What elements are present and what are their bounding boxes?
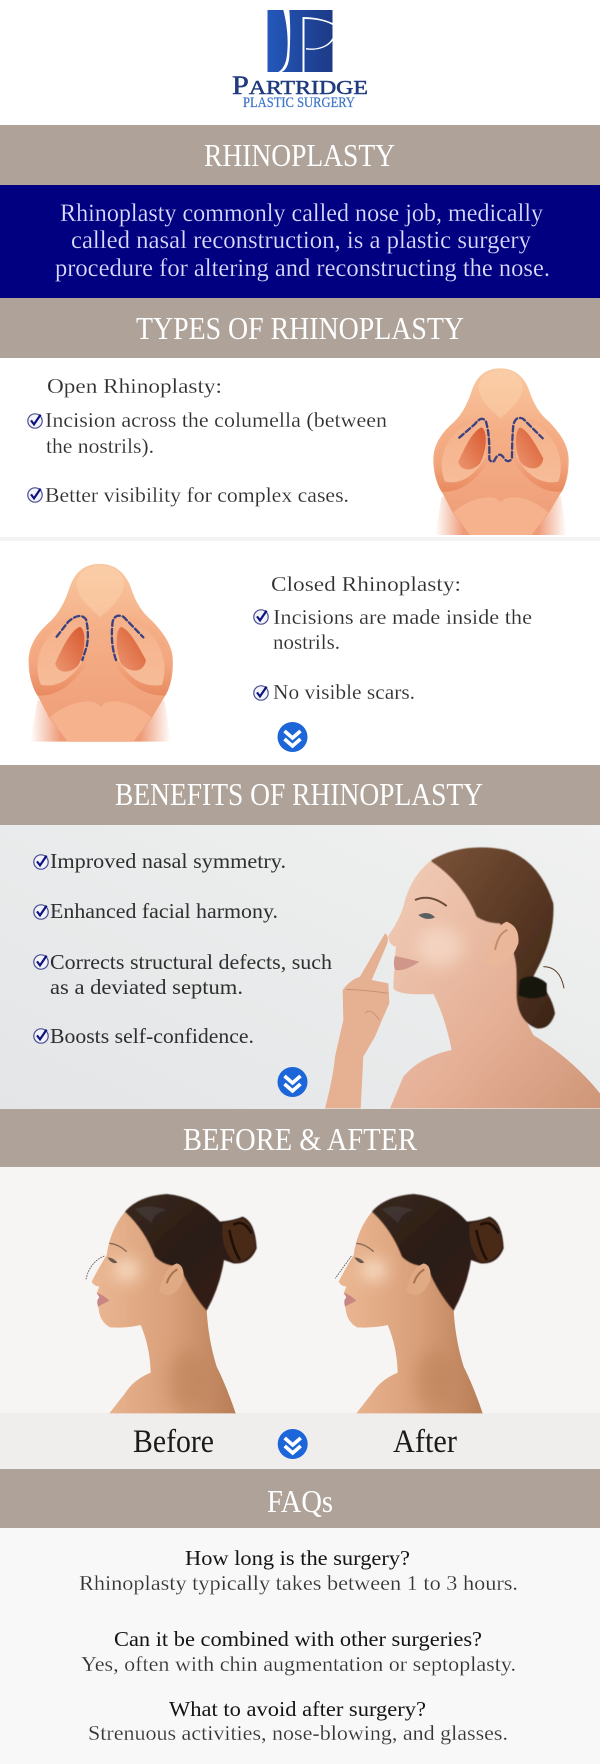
icon: chevron down <box>278 1067 308 1097</box>
panel: before and after <box>0 1167 600 1469</box>
panel: benefits <box>0 825 600 1109</box>
band: benefits heading: BENEFITS OF RHINOPLASTY <box>115 776 483 812</box>
panel: open rhinoplasty <box>0 358 600 537</box>
closed bullet 1: nostrils. <box>273 630 340 654</box>
label: before: Before <box>133 1424 214 1460</box>
faq 2 <box>81 1627 516 1676</box>
faq 3: Strenuous activities, nose-blowing, and glasses. <box>88 1721 508 1745</box>
benefit 3 <box>34 950 332 999</box>
logo subtitle: PLASTIC SURGERY <box>243 95 355 111</box>
logo <box>232 10 368 111</box>
closed bullet 1: Incisions are made inside the <box>273 605 532 629</box>
open bullet 2: Better visibility for complex cases. <box>45 483 349 507</box>
panel: closed rhinoplasty <box>0 541 600 765</box>
logo wordmark: PARTRIDGE <box>232 71 368 100</box>
band: faqs heading <box>0 1469 600 1528</box>
icon: chevron down <box>278 1429 308 1459</box>
open bullet 1: Incision across the columella (between <box>45 408 387 432</box>
benefit 4: Boosts self-confidence. <box>50 1024 254 1048</box>
band: types heading <box>0 298 600 358</box>
closed bullet 2: No visible scars. <box>273 680 415 704</box>
panel: intro <box>0 185 600 298</box>
band: before and after heading: BEFORE & AFTER <box>183 1121 418 1157</box>
benefit 2: Enhanced facial harmony. <box>50 899 278 923</box>
photo: woman touching nose <box>325 847 600 1108</box>
label: after: After <box>393 1424 457 1460</box>
photo: after profile <box>335 1194 504 1413</box>
faq 3: What to avoid after surgery? <box>169 1697 426 1721</box>
closed bullet 1 <box>254 605 532 654</box>
open bullet 1: the nostrils). <box>46 434 154 458</box>
open bullet 1 <box>28 408 387 458</box>
panel: intro: procedure for altering and reconstructing the nose. <box>55 255 550 282</box>
band: faqs heading: FAQs <box>267 1483 333 1519</box>
nose diagram: open incision <box>433 368 569 535</box>
faq 1: Rhinoplasty typically takes between 1 to 3 hours. <box>79 1571 518 1595</box>
closed rhinoplasty title: Closed Rhinoplasty: <box>271 572 461 596</box>
closed incision dashes <box>57 616 143 660</box>
benefit 3: Corrects structural defects, such <box>50 950 332 974</box>
faq 1: How long is the surgery? <box>185 1546 410 1570</box>
panel: intro: Rhinoplasty commonly called nose job, medically <box>60 200 543 227</box>
benefit 1: Improved nasal symmetry. <box>50 849 286 873</box>
faq 1 <box>79 1546 518 1595</box>
photo: before profile <box>86 1194 257 1413</box>
band: benefits heading <box>0 765 600 825</box>
icon: chevron down <box>278 722 308 752</box>
panel: faqs <box>0 1528 600 1764</box>
benefit 3: as a deviated septum. <box>50 975 243 999</box>
faq 2: Can it be combined with other surgeries? <box>114 1627 482 1651</box>
logo mark <box>268 10 332 72</box>
panel: intro: called nasal reconstruction, is a plastic surgery <box>71 227 531 254</box>
faq 2: Yes, often with chin augmentation or septoplasty. <box>81 1652 516 1676</box>
nose diagram: closed incision <box>29 564 173 742</box>
band: before and after heading <box>0 1109 600 1167</box>
faq 3 <box>88 1697 508 1745</box>
band: types heading: TYPES OF RHINOPLASTY <box>136 310 464 346</box>
band: rhinoplasty title: RHINOPLASTY <box>204 137 395 173</box>
band: rhinoplasty title <box>0 125 600 185</box>
open rhinoplasty title: Open Rhinoplasty: <box>47 374 222 398</box>
divider strip <box>0 537 600 541</box>
